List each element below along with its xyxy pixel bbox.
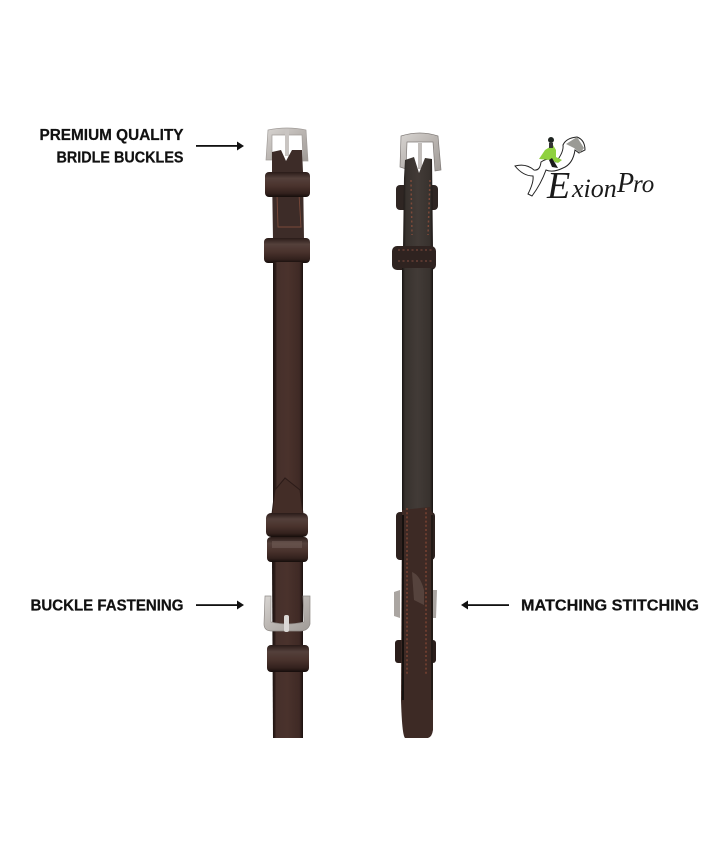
lowest keeper (267, 645, 309, 672)
arrow: to top buckle (196, 142, 244, 150)
double keeper (266, 513, 308, 537)
back strap upper (403, 157, 433, 250)
logo: ExionPro (515, 137, 654, 207)
logo wordmark: E (546, 165, 570, 207)
back buckle (400, 133, 441, 171)
strap upper section (272, 150, 304, 240)
logo wordmark: ro (633, 171, 654, 198)
label: premium quality bridle buckles: BRIDLE BUCKLES (56, 150, 184, 166)
second keeper (264, 238, 310, 263)
upper keeper (265, 172, 310, 197)
icon: horse and rider (515, 137, 585, 196)
strap: front view (264, 128, 310, 738)
top buckle (266, 128, 308, 161)
label: matching stitching: MATCHING STITCHING (521, 598, 699, 614)
pointed overlay (272, 478, 303, 514)
strap: back view (392, 133, 441, 738)
lower buckle (264, 596, 310, 632)
arrow: to lower buckle (196, 600, 244, 610)
long strap (273, 262, 303, 514)
stitched lower strap (401, 507, 433, 738)
arrow: to stitching (461, 600, 509, 610)
logo wordmark: xion (571, 174, 617, 203)
back keeper (392, 246, 436, 270)
logo wordmark: P (616, 168, 634, 199)
label: premium quality bridle buckles: PREMIUM QUALITY (40, 127, 184, 144)
side flaps of lower section (394, 512, 437, 618)
rear keepers behind strap (395, 185, 438, 663)
label: premium quality bridle buckles (40, 127, 184, 166)
label: buckle fastening: BUCKLE FASTENING (30, 598, 184, 614)
lower strap (272, 560, 303, 738)
back strap long (402, 268, 433, 513)
